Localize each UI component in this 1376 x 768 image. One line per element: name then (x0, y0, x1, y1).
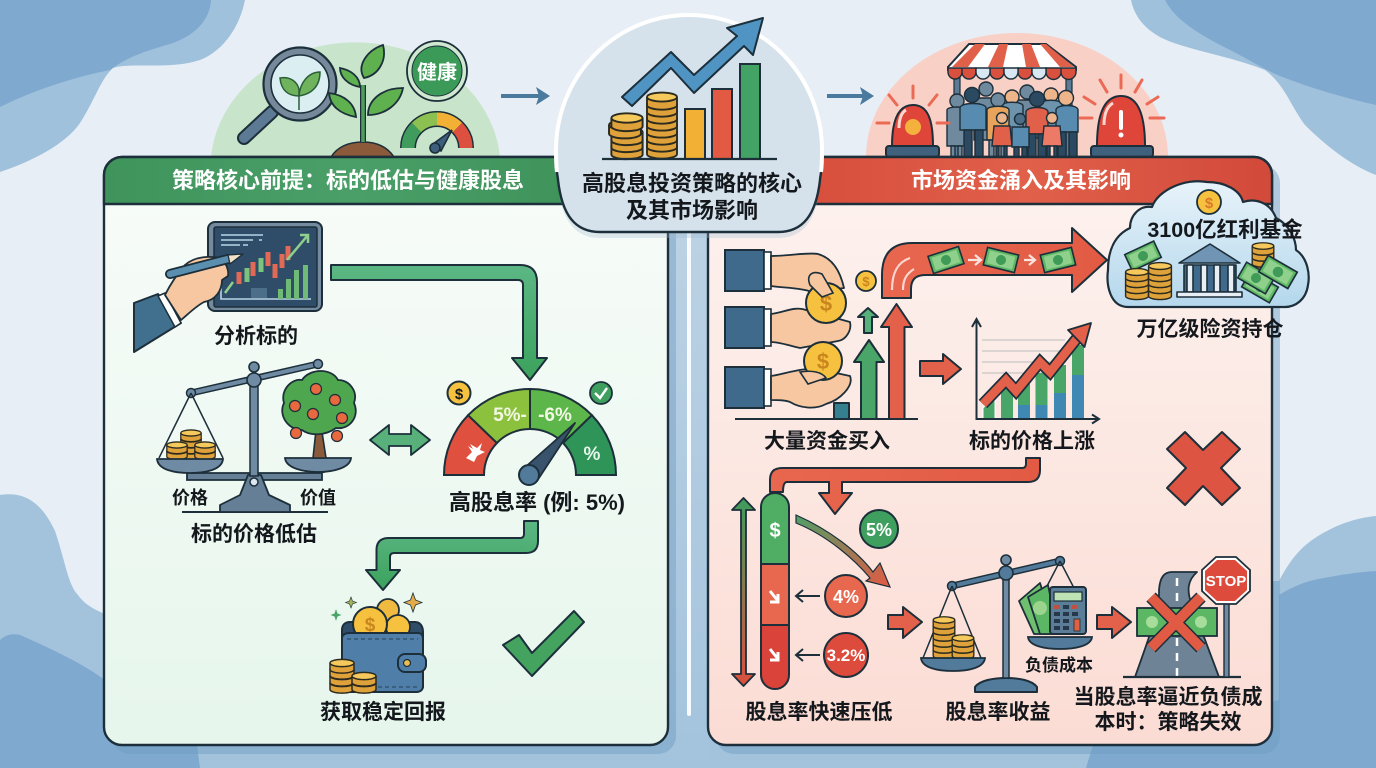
title text (582, 171, 802, 223)
icon: analysing tablet with hand (134, 222, 322, 352)
badge: 4 percent (796, 575, 867, 617)
arrow: buy to price rise (920, 354, 961, 384)
icon: blocked road with stop sign (1123, 557, 1250, 677)
icon: coin upper: $ (820, 291, 832, 316)
header illustration: undervalued and healthy (211, 41, 500, 157)
arrow: to strategy failure (1097, 607, 1131, 638)
gauge: dividend yield: -6% (538, 405, 572, 426)
panel header: inflow (780, 157, 1272, 204)
arrow: analysis to dividend (331, 265, 547, 380)
title text: 高股息投资策略的核心 (582, 171, 802, 196)
bars and rising arrows (735, 304, 918, 419)
label: stable return: 获取稳定回报 (320, 700, 446, 724)
icon: sprout plant (329, 45, 403, 157)
icon: two-way arrow (370, 425, 430, 455)
icon: green check (503, 611, 584, 676)
badge: 4 percent: 4% (833, 587, 859, 607)
chart: price rise (972, 319, 1099, 424)
badge: 5 percent (860, 510, 898, 548)
icon: balance scale price vs value (157, 360, 356, 512)
icon: wallet with coins: $ (365, 615, 376, 636)
icon: health badge (407, 41, 467, 101)
icon: coin lower (804, 342, 842, 380)
icon: bills and coins (1125, 241, 1171, 300)
icon: cloud coin: $ (1205, 195, 1214, 212)
icon: coin upper (806, 283, 846, 323)
label: value: 价值 (300, 488, 336, 508)
panel gutter with divider (668, 225, 708, 768)
icon: yield vs liability scale (921, 555, 1093, 692)
label: high yield: 高股息率 (例: 5%) (449, 490, 625, 515)
title text: 及其市场影响 (626, 198, 758, 223)
panel: market inflow (708, 157, 1280, 754)
icon: fruit tree (282, 371, 356, 458)
icon: crowd of people (947, 82, 1078, 157)
arrow: price rise to yield drop (770, 458, 1040, 514)
badge: 3.2 percent (796, 633, 868, 677)
gauge: dividend yield: % (584, 444, 601, 465)
icon: health badge: 健康 (417, 60, 457, 84)
label: 310B dividend funds: 3100亿红利基金 (1147, 217, 1303, 242)
gauge: dividend yield (444, 382, 616, 485)
panel header: inflow: 市场资金涌入及其影响 (911, 168, 1131, 193)
icon: stop sign: STOP (1206, 573, 1246, 590)
cloud: funds (1108, 181, 1309, 307)
icon: health gauge (408, 119, 466, 153)
icon: bank (1177, 244, 1242, 297)
panel header: premise: 策略核心前提：标的低估与健康股息 (172, 168, 524, 193)
icon: calculator (1050, 587, 1086, 634)
panel: strategy premise (104, 157, 676, 754)
label: yield income: 股息率收益 (946, 700, 1050, 724)
thermometer: yield compression: $ (769, 520, 781, 542)
label: undervalued: 标的价格低估 (191, 523, 317, 546)
icon: small coin (856, 271, 876, 291)
badge: 3.2 percent: 3.2% (827, 646, 865, 665)
icon: dollar coin (448, 382, 470, 404)
arrow: core to market (827, 87, 874, 105)
arrow: to yield scale (888, 607, 922, 638)
icon: market stall (948, 44, 1076, 158)
arrow: premise to core (501, 87, 550, 105)
icon: rising coins and bars (602, 18, 777, 159)
label: strategy failure (1074, 685, 1262, 734)
arrow: capital flow to funds (882, 228, 1107, 298)
center title bubble (556, 15, 822, 238)
label: analyse target: 分析标的 (214, 325, 298, 348)
thermometer: yield compression (761, 493, 789, 689)
icon: hands placing coins (725, 250, 876, 408)
icon: small coin: $ (862, 274, 870, 289)
arrow: yield range up and down (732, 498, 755, 686)
label: liability cost: 负债成本 (1025, 655, 1093, 675)
icon: big red cross (1167, 432, 1240, 505)
icon: wallet with coins (330, 593, 426, 693)
icon: check badge (590, 382, 612, 404)
icon: coin lower: $ (817, 349, 829, 374)
icon: dollar coin: $ (455, 386, 464, 403)
label: mass buy: 大量资金买入 (764, 429, 890, 453)
label: price: 价格 (172, 488, 208, 508)
label: strategy failure: 本时：策略失效 (1094, 711, 1242, 734)
icon: left siren (877, 86, 949, 157)
label: yield drop: 股息率快速压低 (746, 700, 892, 724)
panel header: premise (104, 157, 600, 204)
label: strategy failure: 当股息率逼近负债成 (1074, 685, 1262, 709)
icon: coins and cash pile (1238, 243, 1297, 303)
label: price rise: 标的价格上涨 (969, 430, 1095, 453)
icon: cloud coin (1197, 190, 1221, 214)
icon: right siren with alert (1080, 75, 1164, 157)
arrow: falling curve (796, 515, 890, 587)
header illustration: crowd and sirens (866, 33, 1168, 158)
arrow: yield to return (366, 521, 538, 590)
icon: magnifier with sprout (244, 48, 336, 138)
label: trillion insurance: 万亿级险资持仓 (1136, 317, 1284, 341)
badge: 5 percent: 5% (866, 520, 892, 540)
gauge: dividend yield: 5%- (493, 405, 527, 426)
